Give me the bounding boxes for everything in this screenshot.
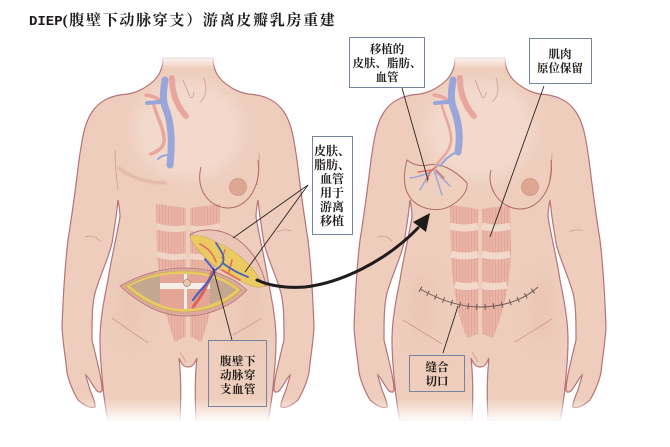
callout: flap tissue: 皮肤、 xyxy=(314,143,350,158)
body silhouette xyxy=(354,58,606,420)
abdominal incision xyxy=(120,268,247,316)
callout: flap tissue: 移植 xyxy=(320,213,344,228)
callout: flap tissue: 游离 xyxy=(320,199,344,214)
callout: muscle preserved: 原位保留 xyxy=(537,61,583,75)
nipple xyxy=(230,178,246,196)
perforator vessels xyxy=(193,270,215,307)
callout: sutured incision: 缝合 xyxy=(426,360,449,374)
callout: sutured incision xyxy=(410,356,464,392)
callout: flap tissue xyxy=(312,136,352,234)
body silhouette xyxy=(62,58,314,420)
abdominal muscles xyxy=(450,205,511,338)
figure: before surgery, abdominal flap harvest xyxy=(55,55,320,422)
callout: muscle preserved: 肌肉 xyxy=(548,47,572,61)
callout: perforator vessels: 支血管 xyxy=(220,382,256,396)
curved transfer arrow xyxy=(257,213,430,287)
soft body shading xyxy=(116,80,264,345)
callout: muscle preserved xyxy=(530,38,592,84)
callout: perforator vessels: 动脉穿 xyxy=(220,368,256,382)
callout: transplanted tissue xyxy=(350,38,424,88)
callout: perforator vessels: 腹壁下 xyxy=(220,354,256,368)
chest vessels xyxy=(146,78,186,165)
flap vessels xyxy=(200,243,248,280)
transplanted breast xyxy=(404,160,467,210)
soft body shading xyxy=(408,80,556,345)
callout: perforator vessels xyxy=(208,340,266,406)
callout: flap tissue: 用于 xyxy=(320,186,344,200)
callout: sutured incision: 切口 xyxy=(426,374,448,388)
callout: flap tissue: 脂肪、 xyxy=(314,157,350,172)
fade at legs and neck xyxy=(347,398,612,422)
title: DIEP(腹壁下动脉穿支）游离皮瓣乳房重建 xyxy=(29,11,337,30)
suture incision xyxy=(420,287,538,307)
fade at legs and neck xyxy=(55,398,320,422)
flap vessels xyxy=(410,165,450,195)
chest vessels xyxy=(434,78,474,166)
lifted abdominal flap xyxy=(190,230,266,287)
chest and limb creases xyxy=(377,78,583,362)
callout: transplanted tissue: 血管 xyxy=(376,70,399,84)
leader lines xyxy=(213,86,544,353)
callout: flap tissue: 血管 xyxy=(320,171,344,186)
callout: transplanted tissue: 皮肤、脂肪、 xyxy=(352,56,422,70)
nipple xyxy=(522,178,538,196)
callout: transplanted tissue: 移植的 xyxy=(370,42,405,56)
figure: after surgery, reconstructed breast xyxy=(347,55,612,422)
breast xyxy=(200,160,259,208)
native breast xyxy=(490,160,551,209)
chest and limb creases xyxy=(85,78,291,362)
abdominal muscles xyxy=(156,204,220,342)
chest scar xyxy=(118,167,167,183)
